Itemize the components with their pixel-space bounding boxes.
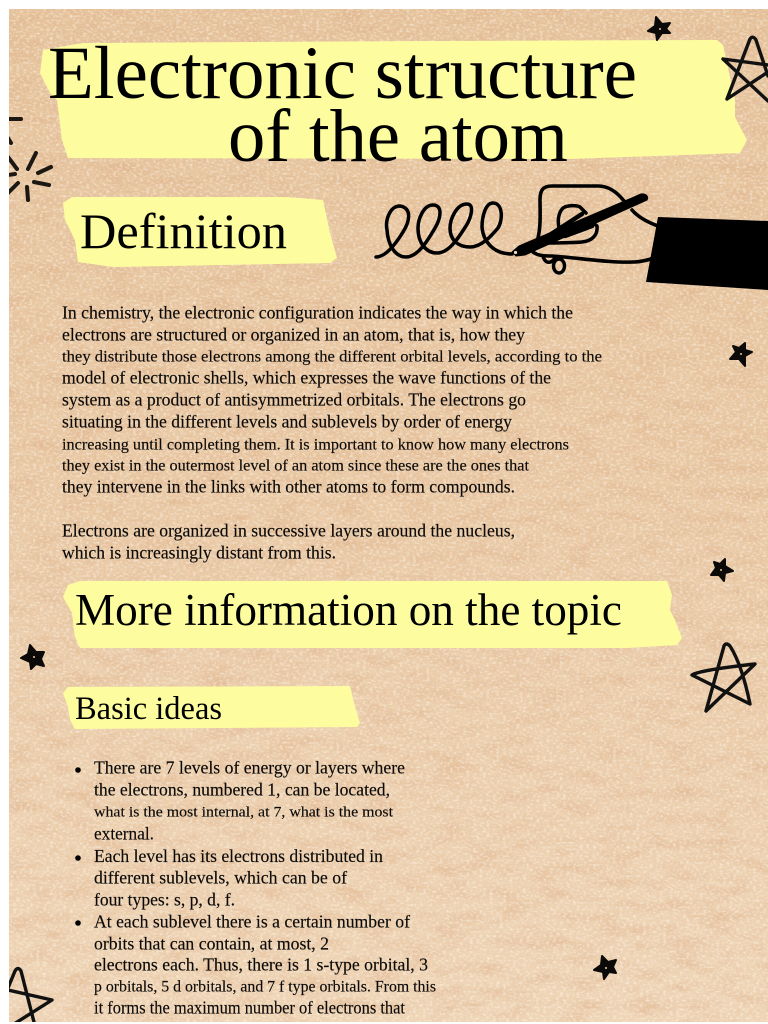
title highlight and heading: of the atom	[228, 95, 568, 178]
bullet 1: external.	[94, 824, 154, 844]
definition text: they intervene in the links with other atoms to form compounds.	[62, 476, 515, 496]
heading: Definition: Definition	[80, 203, 287, 259]
bullet 2: Each level has its electrons distributed in	[94, 846, 383, 866]
heading: Basic ideas	[63, 686, 360, 729]
heading: More information on the topic: More information on the topic	[75, 585, 622, 635]
bullet 3	[75, 912, 436, 1018]
definition text: model of electronic shells, which expresses the wave functions of the	[62, 368, 551, 388]
definition text: situating in the different levels and sublevels by order of energy	[62, 412, 512, 432]
heading: Basic ideas: Basic ideas	[75, 691, 222, 727]
bullet 3: electrons each. Thus, there is 1 s-type orbital, 3	[94, 954, 428, 974]
doodle: small star left	[21, 645, 44, 669]
illustration: hand drawing a spiral	[376, 186, 768, 290]
doodle: small star mid right	[711, 559, 733, 581]
bullet 1: what is the most internal, at 7, what is the most	[94, 804, 394, 820]
bullet 3: p orbitals, 5 d orbitals, and 7 f type orbitals. From this	[94, 978, 436, 996]
definition text: which is increasingly distant from this.	[62, 542, 336, 562]
bullet 1: the electrons, numbered 1, can be located,	[94, 780, 390, 800]
grip shading	[545, 214, 592, 238]
title highlight and heading: Electronic structure	[48, 32, 637, 115]
doodle: small star top	[648, 17, 670, 40]
definition text	[62, 302, 602, 562]
pencil tip	[514, 251, 517, 254]
definition text: they distribute those electrons among the different orbital levels, according to the	[62, 348, 602, 366]
definition text: Electrons are organized in successive layers around the nucleus,	[62, 520, 515, 540]
bullet 2: four types: s, p, d, f.	[94, 890, 235, 910]
bullet list	[75, 758, 436, 1018]
bullet 1	[75, 758, 405, 844]
heading: More information on the topic	[63, 581, 682, 648]
fingers	[538, 206, 597, 262]
pencil	[512, 194, 648, 256]
bullet 2	[75, 846, 383, 910]
definition text: system as a product of antisymmetrized orbitals. The electrons go	[62, 390, 526, 410]
finger tip	[554, 259, 564, 273]
title highlight and heading	[40, 32, 747, 178]
spiral scribble	[376, 203, 512, 257]
definition text: In chemistry, the electronic configuration indicates the way in which the	[62, 302, 573, 322]
definition text: they exist in the outermost level of an atom since these are the ones that	[62, 458, 530, 474]
heading: Definition	[63, 197, 337, 267]
doodle: outline star top right	[723, 37, 768, 101]
definition text: increasing until completing them. It is important to know how many electrons	[62, 436, 569, 454]
bullet 2: different sublevels, which can be of	[94, 868, 347, 888]
sleeve	[646, 217, 768, 290]
bullet 3: orbits that can contain, at most, 2	[94, 934, 329, 954]
doodle: small star bottom	[594, 956, 616, 979]
bullet 3: At each sublevel there is a certain number of	[94, 912, 410, 932]
doodle: outline star bottom left	[8, 968, 52, 1024]
doodle: outline star mid right	[692, 644, 755, 711]
bullet 1: There are 7 levels of energy or layers where	[94, 758, 405, 778]
hand outline	[533, 186, 658, 262]
bullet 3: it forms the maximum number of electrons that	[94, 998, 405, 1018]
definition text: electrons are structured or organized in an atom, that is, how they	[62, 324, 525, 344]
doodle: small star right	[730, 343, 752, 366]
doodle: burst lines	[8, 119, 51, 200]
